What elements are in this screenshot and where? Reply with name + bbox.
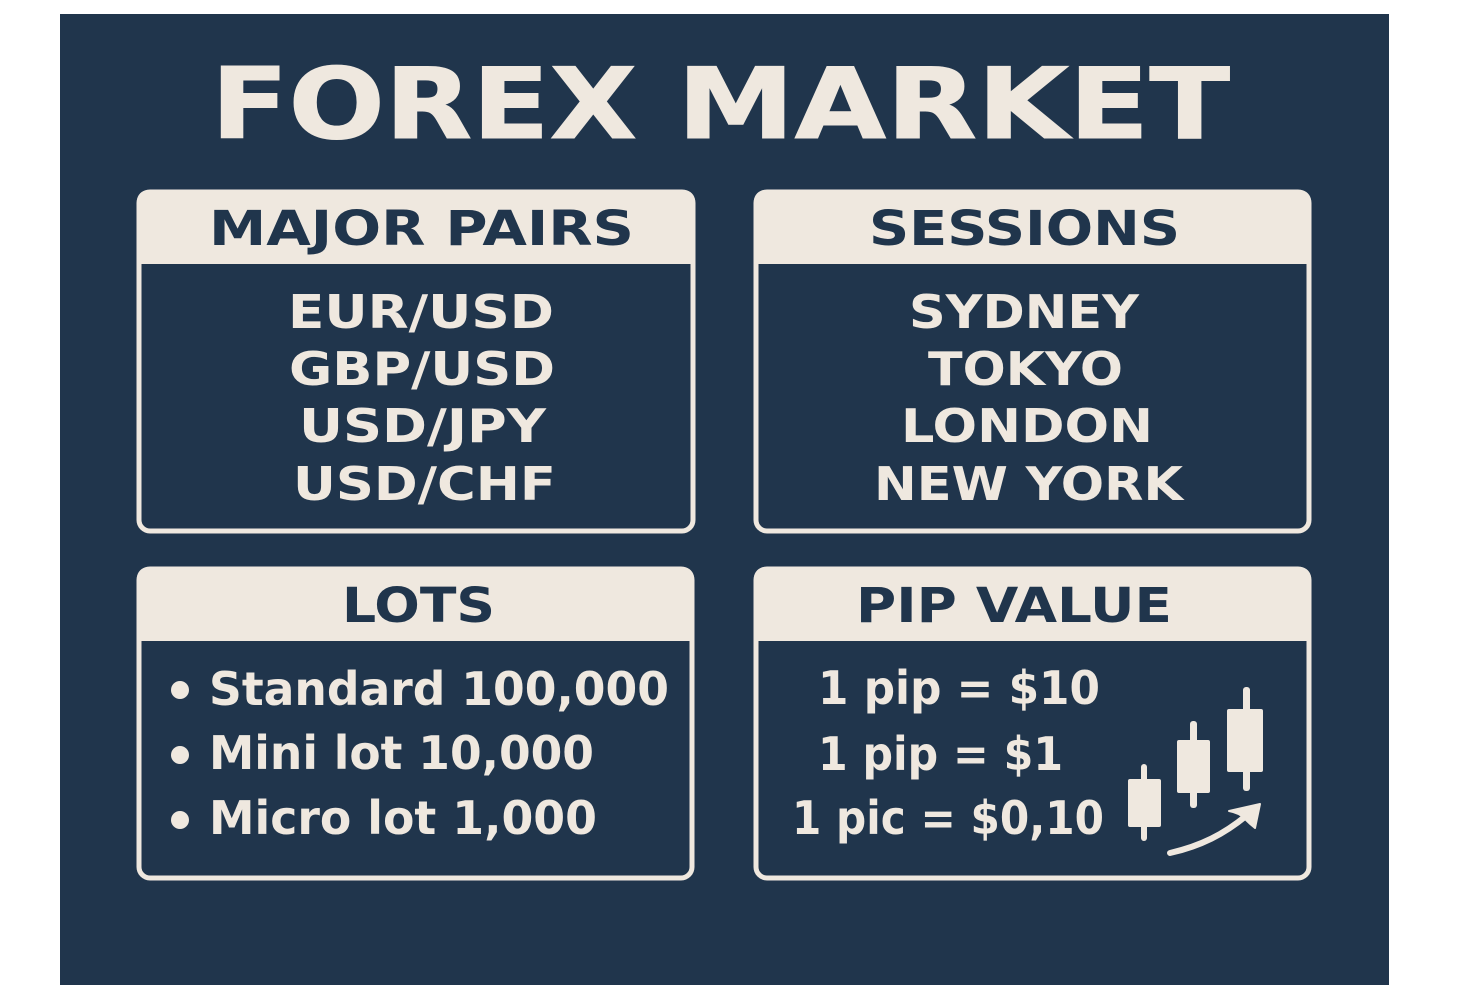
list: trading sessions: TOKYO: [928, 342, 1123, 396]
list: lot sizes: Mini lot 10,000: [209, 726, 594, 780]
list: currency pairs: USD/CHF: [293, 457, 556, 511]
icon: upward arrow: [1170, 804, 1260, 853]
panel header: lots: [137, 567, 694, 641]
title: [211, 48, 1230, 162]
panel: pip value: [754, 567, 1311, 878]
heading: lots: LOTS: [342, 578, 495, 634]
list: pip values: 1 pip = $1: [818, 727, 1063, 781]
list: currency pairs: EUR/USD: [288, 285, 554, 339]
list: pip values: 1 pip = $10: [818, 661, 1100, 715]
list: currency pairs: GBP/USD: [289, 342, 555, 396]
title: FOREX: [211, 48, 637, 162]
list: trading sessions: LONDON: [901, 399, 1153, 453]
list: trading sessions: [874, 285, 1186, 511]
list: lot sizes: Micro lot 1,000: [209, 791, 597, 845]
list: pip values: [792, 661, 1104, 845]
heading: pip value: PIP VALUE: [856, 578, 1172, 634]
panel header: sessions: [754, 190, 1311, 264]
list: lot sizes: Standard 100,000: [209, 662, 669, 716]
heading: major pairs: MAJOR PAIRS: [209, 201, 634, 257]
title: MARKET: [677, 48, 1230, 162]
list: currency pairs: [288, 285, 556, 511]
panel header: pip value: [754, 567, 1311, 641]
panel: sessions: [754, 190, 1311, 531]
list: trading sessions: NEW YORK: [874, 457, 1186, 511]
icon: candlestick chart: [1128, 687, 1263, 841]
list: trading sessions: SYDNEY: [909, 285, 1140, 339]
panel: lots: [137, 567, 694, 878]
list: pip values: 1 pic = $0,10: [792, 791, 1104, 845]
panel: major pairs: [137, 190, 695, 531]
list: currency pairs: USD/JPY: [299, 399, 547, 453]
list: lot sizes: [171, 662, 669, 845]
panel header: major pairs: [137, 190, 695, 264]
heading: sessions: SESSIONS: [869, 201, 1180, 257]
